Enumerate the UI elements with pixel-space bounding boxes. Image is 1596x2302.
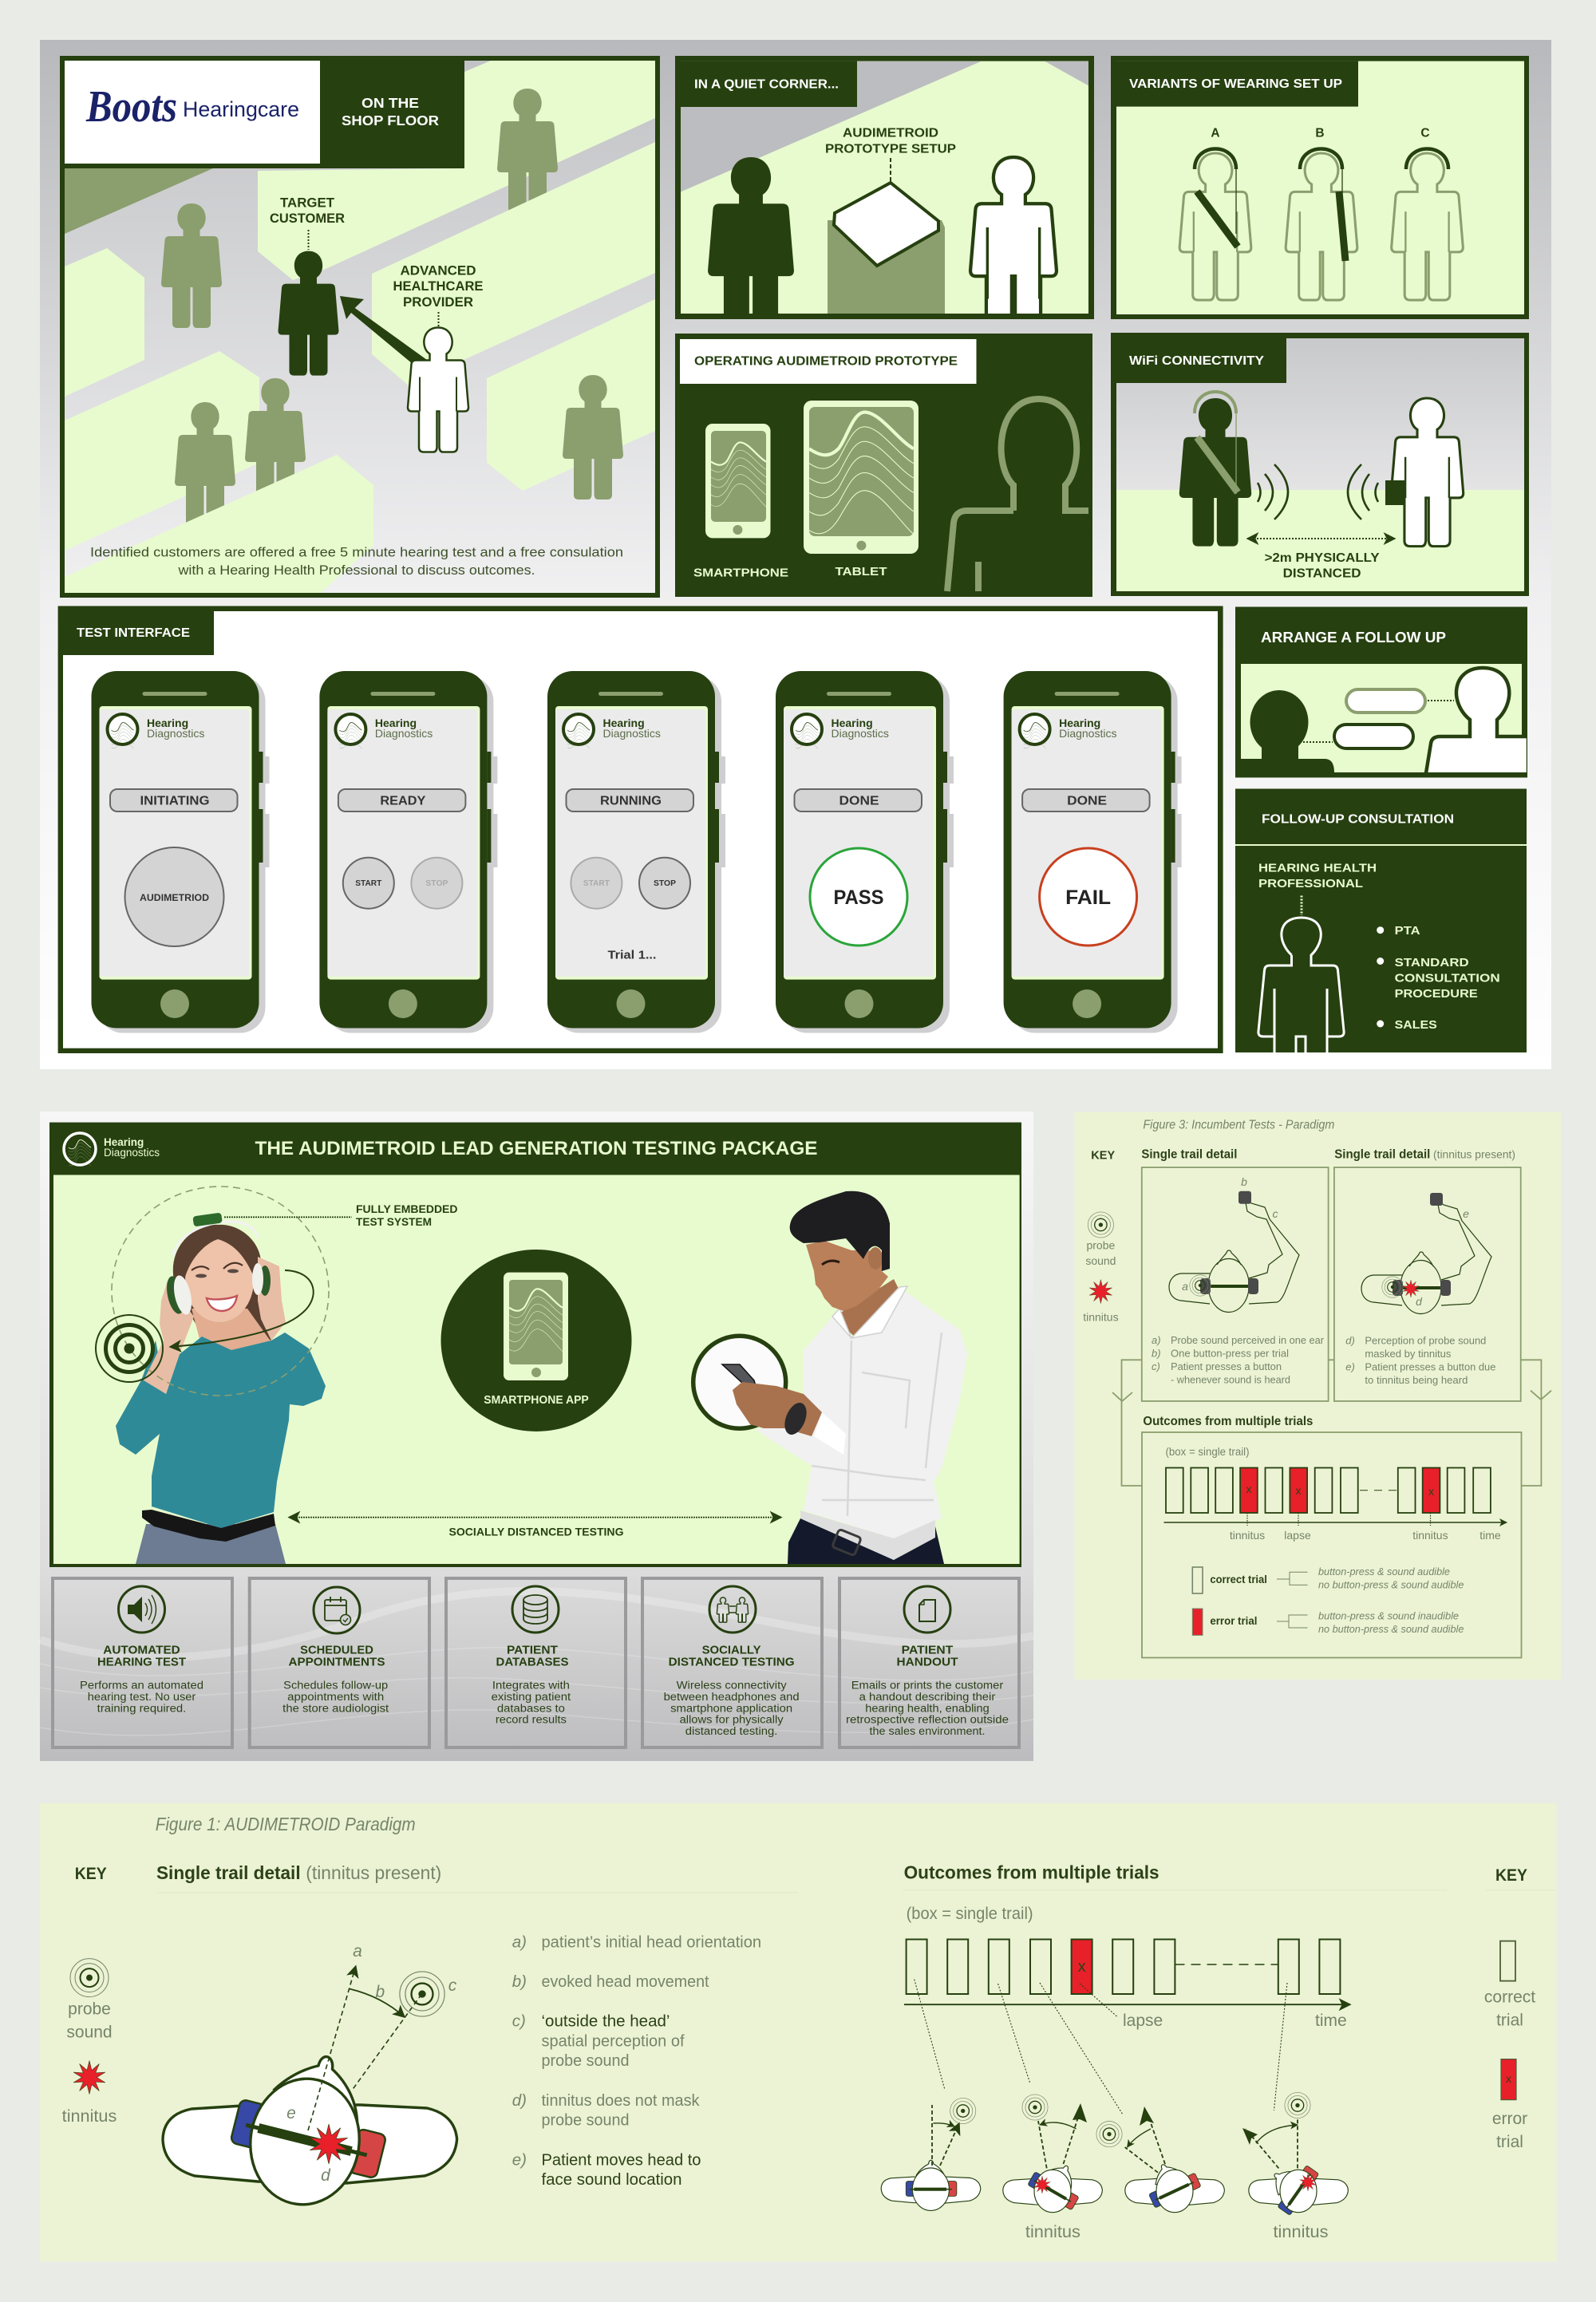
phone: ready: READY <box>380 795 426 808</box>
panel: follow-up consultation <box>1235 788 1527 1057</box>
box: outcomes from multiple trials: (box = single trail) <box>1165 1446 1250 1458</box>
speech bubbles <box>1303 689 1454 748</box>
list: consultation contents: PTA <box>1395 924 1420 938</box>
phone: initiating <box>91 671 270 1033</box>
illustration: woman with headphones <box>116 1213 326 1564</box>
heading: test interface: TEST INTERFACE <box>77 626 190 640</box>
list: paradigm notes: a) <box>512 1933 527 1952</box>
panel: test interface <box>58 606 1223 1053</box>
phone: running: START <box>583 879 610 888</box>
heading: on the shop floor: SHOP FLOOR <box>342 113 439 128</box>
icon: user outline <box>947 399 1088 591</box>
heading: on the shop floor: ON THE <box>361 95 419 111</box>
chart: trial sequence: x <box>1078 1958 1086 1976</box>
list: paradigm notes: face sound location <box>541 2170 681 2189</box>
icon: customer behind shelf <box>497 89 558 213</box>
card: automated hearing test: training required. <box>97 1702 186 1714</box>
panel: operating audimetroid prototype <box>675 334 1092 597</box>
box: outcomes from multiple trials: lapse <box>1284 1529 1311 1542</box>
box: single trial detail with tinnitus: Patient presses a button due <box>1365 1361 1495 1373</box>
card: scheduled appointments: APPOINTMENTS <box>289 1655 385 1668</box>
icon: provider with tablet <box>1348 398 1464 547</box>
panel: in a quiet corner <box>675 56 1094 334</box>
arrow: provider to customer <box>340 296 427 364</box>
phone: initiating: INITIATING <box>140 795 209 808</box>
label: tinnitus trials: tinnitus <box>1025 2223 1080 2241</box>
key: right <box>1484 1866 1535 2151</box>
diagram: head movement: b <box>376 1983 385 2001</box>
box: single trial detail with tinnitus <box>1334 1148 1521 1401</box>
logo: hearing diagnostics: Diagnostics <box>104 1147 160 1159</box>
phone: done pass: Diagnostics <box>832 727 889 740</box>
list: consultation contents: SALES <box>1395 1018 1437 1032</box>
list: consultation contents <box>1377 924 1500 1032</box>
panel: arrange a follow up: ARRANGE A FOLLOW UP <box>1261 630 1446 646</box>
label: tablet: TABLET <box>835 565 887 578</box>
card: patient databases: databases to <box>497 1702 565 1714</box>
icon: target customer <box>278 251 338 376</box>
card: patient databases: existing patient <box>492 1691 571 1703</box>
trial legend: error trial <box>1210 1615 1257 1627</box>
logo: hearing diagnostics <box>64 1133 160 1166</box>
card: scheduled appointments <box>250 1578 429 1747</box>
panel: figure 1 audimetroid paradigm <box>40 1803 1556 2261</box>
list: paradigm notes: probe sound <box>541 2110 629 2129</box>
card: socially distanced testing: between headphones and <box>664 1691 800 1703</box>
key: right: correct <box>1484 1988 1535 2006</box>
key: right: trial <box>1496 2133 1523 2151</box>
variant C: C <box>1420 127 1430 140</box>
phone: running <box>547 671 725 1033</box>
heading: test interface <box>63 611 214 655</box>
key: probe sound and tinnitus: probe <box>1086 1238 1116 1251</box>
box: outcomes from multiple trials: x <box>1296 1484 1301 1497</box>
card: patient handout: the sales environment. <box>870 1725 985 1737</box>
box: single trial detail with tinnitus: d) <box>1345 1335 1355 1347</box>
label: healthcare provider <box>393 263 484 327</box>
label: prototype setup: AUDIMETROID <box>843 127 938 140</box>
label: physically distanced: >2m PHYSICALLY <box>1265 551 1380 565</box>
decorative orbit <box>112 1187 329 1396</box>
diagram: trial 4 head with tinnitus <box>1242 2092 1348 2216</box>
card: patient handout: Emails or prints the customer <box>851 1680 1004 1692</box>
panel: follow-up consultation: FOLLOW-UP CONSULTATION <box>1262 812 1454 826</box>
panel: figure 3 incumbent tests <box>1074 1112 1562 1680</box>
diagram: head movement <box>163 1942 457 2212</box>
logo box <box>65 61 320 164</box>
panel: lead generation testing package <box>49 1123 1021 1567</box>
box: single trial detail with tinnitus: e <box>1463 1207 1469 1220</box>
box: single trial detail <box>1141 1148 1329 1401</box>
label: smartphone: SMARTPHONE <box>693 567 788 580</box>
callout: fully embedded test system <box>224 1203 458 1228</box>
panel: figure 3 incumbent tests: Figure 3: Incumbent Tests - Paradigm <box>1143 1119 1334 1132</box>
trial legend: correct trial <box>1210 1573 1267 1585</box>
diagram: head movement: a <box>353 1942 362 1960</box>
phone: done pass: DONE <box>839 795 879 808</box>
card: scheduled appointments: the store audiologist <box>282 1702 389 1714</box>
arrow: physical distance <box>1247 538 1395 539</box>
label: healthcare provider: ADVANCED <box>401 263 476 278</box>
box: outcomes from multiple trials: tinnitus <box>1230 1529 1265 1542</box>
label: prototype setup <box>825 127 956 156</box>
card: patient databases: DATABASES <box>496 1655 568 1668</box>
icon: tablet <box>804 401 918 554</box>
panel: storyboard backdrop <box>40 40 1551 1069</box>
phone: ready: Hearing <box>375 717 417 729</box>
card: automated hearing test: HEARING TEST <box>97 1655 186 1668</box>
icon: calendar <box>314 1587 360 1633</box>
panel: variants of wearing set up <box>1111 56 1529 319</box>
arrow: curved sound path <box>170 1270 314 1347</box>
heading: operating prototype: OPERATING AUDIMETROID PROTOTYPE <box>694 355 958 369</box>
variant A <box>1179 127 1251 300</box>
diagram: head movement: d <box>321 2166 331 2185</box>
key: probe sound and tinnitus <box>1083 1212 1119 1324</box>
panel: figure 1 audimetroid paradigm: Figure 1: AUDIMETROID Paradigm <box>156 1814 416 1834</box>
heading: variants <box>1116 61 1358 107</box>
heading: wifi: WiFi CONNECTIVITY <box>1129 354 1264 368</box>
caption: shop floor <box>90 544 623 578</box>
card: patient handout: hearing health, enabling <box>865 1702 990 1714</box>
box: single trial detail: b <box>1241 1175 1247 1188</box>
box: single trial detail with tinnitus: (tinnitus present) <box>1433 1149 1515 1161</box>
list: paradigm notes: spatial perception of <box>541 2032 685 2051</box>
icon: customer head <box>1235 690 1334 772</box>
caption: shop floor: Identified customers are offered a free 5 minute hearing test and a free consulation <box>90 544 623 560</box>
key: right: trial <box>1496 2011 1523 2030</box>
arrow: socially distanced <box>289 1517 781 1518</box>
icon: smartphone <box>705 424 771 538</box>
box: single trial detail: Single trail detail <box>1141 1148 1237 1162</box>
key: left: probe <box>68 2000 111 2019</box>
card: automated hearing test <box>53 1578 232 1747</box>
box: outcomes from multiple trials: time <box>1479 1529 1501 1542</box>
card: socially distanced testing: allows for physically <box>680 1714 784 1726</box>
list: paradigm notes: probe sound <box>541 2051 629 2070</box>
phone: done fail: Hearing <box>1059 717 1100 729</box>
label: target customer: CUSTOMER <box>270 211 345 226</box>
key: right: error <box>1492 2110 1527 2128</box>
label: tinnitus trials: tinnitus <box>1274 2223 1328 2241</box>
chart: trial sequence <box>904 1939 1350 2114</box>
panel: arrange a follow up <box>1235 606 1528 778</box>
key: probe sound and tinnitus: sound <box>1085 1254 1116 1267</box>
label: target customer <box>270 196 345 250</box>
card: patient handout <box>839 1578 1019 1747</box>
box: single trial detail: b) <box>1152 1348 1161 1360</box>
icon: two people <box>709 1586 756 1633</box>
phone: ready: Diagnostics <box>375 727 433 740</box>
phone: done pass: PASS <box>833 886 884 909</box>
phone: initiating: Diagnostics <box>147 727 204 740</box>
heading: single trial detail: Single trail detail <box>156 1862 301 1883</box>
card: socially distanced testing <box>642 1578 822 1747</box>
diagram: trial 1 head <box>881 2098 981 2210</box>
phone: running: Trial 1... <box>608 949 656 962</box>
phone: done fail: FAIL <box>1065 886 1111 909</box>
list: paradigm notes: d) <box>512 2091 527 2110</box>
label: physically distanced: DISTANCED <box>1283 567 1361 581</box>
card: patient handout: PATIENT <box>902 1644 953 1657</box>
phone: running: STOP <box>654 879 676 888</box>
box: single trial detail: - whenever sound is heard <box>1171 1373 1290 1385</box>
heading: single trial detail <box>156 1862 441 1883</box>
box: single trial detail: Patient presses a button <box>1171 1360 1282 1372</box>
box: single trial detail with tinnitus: masked by tinnitus <box>1365 1348 1452 1360</box>
phone: initiating: Hearing <box>147 717 188 729</box>
heading: outcomes: Outcomes from multiple trials <box>904 1862 1159 1882</box>
box: single trial detail: c <box>1272 1207 1278 1220</box>
illustration: man with smartphone <box>693 1191 967 1564</box>
label: target customer: TARGET <box>280 196 334 211</box>
icon: professional outline <box>1258 895 1344 1057</box>
card: scheduled appointments: SCHEDULED <box>300 1644 373 1657</box>
card: patient handout: a handout describing their <box>859 1691 996 1703</box>
variant B: B <box>1315 127 1325 140</box>
diagram: head movement: e <box>286 2104 296 2122</box>
card: socially distanced testing: distanced testing. <box>685 1725 777 1737</box>
trial legend: button-press & sound audible <box>1318 1566 1450 1577</box>
card: patient databases <box>446 1578 626 1747</box>
phone: done fail: DONE <box>1067 795 1107 808</box>
key: right: KEY <box>1495 1866 1527 1885</box>
card: socially distanced testing: SOCIALLY <box>702 1644 761 1657</box>
label: physically distanced <box>1265 551 1380 581</box>
trial legend: no button-press & sound audible <box>1318 1623 1464 1635</box>
box: single trial detail with tinnitus: to tinnitus being heard <box>1365 1374 1468 1386</box>
phone: running: Diagnostics <box>603 727 661 740</box>
list: consultation contents: PROCEDURE <box>1395 987 1478 1001</box>
variant A: A <box>1211 127 1220 140</box>
phone: running: Hearing <box>603 717 645 729</box>
card: scheduled appointments: Schedules follow-up <box>283 1680 388 1692</box>
caption: shop floor: with a Hearing Health Professional to discuss outcomes. <box>177 563 535 578</box>
box: single trial detail with tinnitus: Perception of probe sound <box>1365 1335 1486 1347</box>
key: left: tinnitus <box>62 2107 117 2126</box>
label: hearing health professional: PROFESSIONAL <box>1258 877 1363 890</box>
phone: ready: STOP <box>425 879 448 888</box>
key: right: x <box>1506 2072 1511 2085</box>
callout: fully embedded test system: FULLY EMBEDDED <box>356 1203 458 1215</box>
badge: smartphone app: SMARTPHONE APP <box>484 1394 589 1407</box>
label: hearing health professional: HEARING HEALTH <box>1258 862 1377 875</box>
icon: speaker <box>118 1586 164 1633</box>
icon: customer and provider <box>708 157 1057 334</box>
connectors <box>1112 1360 1551 1486</box>
key: probe sound and tinnitus: tinnitus <box>1083 1311 1119 1324</box>
heading: single trial detail: (tinnitus present) <box>306 1862 441 1883</box>
panel: on the shop floor <box>60 56 660 598</box>
list: paradigm notes: tinnitus does not mask <box>541 2091 700 2110</box>
list: paradigm notes: ‘outside the head’ <box>541 2012 670 2030</box>
panel: audimetroid package backdrop <box>40 1112 1033 1761</box>
label: healthcare provider: PROVIDER <box>403 295 473 310</box>
card: scheduled appointments: appointments with <box>287 1691 384 1703</box>
callout: fully embedded test system: TEST SYSTEM <box>356 1216 432 1228</box>
list: consultation contents: CONSULTATION <box>1395 972 1500 985</box>
label: healthcare provider: HEALTHCARE <box>393 279 484 294</box>
icon: document <box>904 1586 950 1633</box>
card: socially distanced testing: Wireless connectivity <box>677 1680 787 1692</box>
card: socially distanced testing: DISTANCED TESTING <box>669 1655 795 1668</box>
list: paradigm notes: c) <box>512 2012 526 2030</box>
card: automated hearing test: AUTOMATED <box>103 1644 180 1657</box>
box: single trial detail with tinnitus: e) <box>1345 1361 1355 1373</box>
card: automated hearing test: hearing test. No user <box>88 1691 196 1703</box>
trial legend <box>1192 1566 1464 1635</box>
heading: in a quiet corner <box>681 61 857 107</box>
variant B <box>1286 127 1357 300</box>
box: outcomes from multiple trials: x <box>1428 1485 1434 1498</box>
heading: in a quiet corner: IN A QUIET CORNER... <box>694 78 839 92</box>
list: paradigm notes: e) <box>512 2150 527 2169</box>
phone: ready: START <box>355 879 382 888</box>
card: patient handout: HANDOUT <box>897 1655 958 1668</box>
logo: hearing diagnostics: Hearing <box>104 1136 144 1148</box>
box: single trial detail: Probe sound perceived in one ear <box>1171 1334 1325 1346</box>
chart: trial sequence: lapse <box>1123 2012 1163 2030</box>
box: single trial detail: a) <box>1152 1334 1161 1346</box>
list: paradigm notes: b) <box>512 1972 527 1991</box>
phone: done fail <box>1004 671 1182 1033</box>
variant C <box>1392 127 1463 300</box>
list: consultation contents: STANDARD <box>1395 956 1469 969</box>
box: outcomes from multiple trials: tinnitus <box>1412 1529 1448 1542</box>
panel: figure 3 incumbent tests: KEY <box>1091 1149 1115 1162</box>
heading: wifi <box>1116 338 1286 383</box>
icon: sound target <box>96 1315 163 1382</box>
label: prototype setup: PROTOTYPE SETUP <box>825 142 956 156</box>
card: patient databases: Integrates with <box>492 1680 570 1692</box>
badge: smartphone app <box>440 1250 632 1431</box>
logo box: Boots <box>85 82 177 132</box>
icon: wearing customer <box>1179 392 1288 547</box>
trial legend: no button-press & sound audible <box>1318 1578 1464 1590</box>
box: outcomes from multiple trials: Outcomes from multiple trials <box>1143 1415 1313 1428</box>
key: left: sound <box>66 2024 113 2041</box>
list: paradigm notes <box>512 1933 761 2189</box>
phone: ready <box>319 671 497 1033</box>
title: THE AUDIMETROID LEAD GENERATION TESTING PACKAGE <box>255 1138 817 1159</box>
label: tinnitus trials <box>1025 2223 1328 2241</box>
card: patient databases: PATIENT <box>507 1644 558 1657</box>
diagram: trial 2 head with tinnitus <box>1003 2095 1102 2213</box>
icon: prototype setup <box>828 158 945 314</box>
box: single trial detail with tinnitus: Single trail detail <box>1334 1148 1430 1162</box>
chart: trial sequence: time <box>1315 2012 1347 2030</box>
panel: wifi connectivity <box>1111 333 1529 596</box>
icon: healthcare provider <box>408 327 468 452</box>
label: hearing health professional <box>1258 862 1377 890</box>
logo box: Hearingcare <box>183 97 299 121</box>
heading: variants: VARIANTS OF WEARING SET UP <box>1129 77 1342 91</box>
diagram: trial 3 head <box>1096 2107 1224 2213</box>
diagram: head movement: c <box>448 1976 457 1995</box>
box: single trial detail: a <box>1182 1280 1188 1293</box>
icon: database <box>512 1586 559 1633</box>
heading: on the shop floor <box>65 61 464 168</box>
phone: done pass: Hearing <box>832 717 873 729</box>
phone: running: RUNNING <box>600 795 662 808</box>
phone: done pass <box>776 671 954 1033</box>
label: socially distanced testing: SOCIALLY DISTANCED TESTING <box>448 1526 624 1538</box>
box: single trial detail: One button-press per trial <box>1171 1348 1289 1360</box>
trial legend: button-press & sound inaudible <box>1318 1610 1459 1622</box>
heading: operating prototype <box>680 339 977 384</box>
list: paradigm notes: evoked head movement <box>541 1972 709 1991</box>
key: left <box>62 1865 117 2126</box>
box: outcomes from multiple trials <box>1142 1415 1521 1658</box>
box: single trial detail with tinnitus: d <box>1416 1295 1423 1308</box>
note: box = single trail: (box = single trail) <box>907 1905 1033 1923</box>
list: paradigm notes: patient’s initial head orientation <box>541 1933 761 1952</box>
icon: background customers <box>161 203 623 527</box>
card: patient databases: record results <box>496 1714 567 1726</box>
card: socially distanced testing: smartphone application <box>670 1702 792 1714</box>
card: patient handout: retrospective reflection outside <box>846 1714 1009 1726</box>
list: paradigm notes: Patient moves head to <box>541 2150 701 2169</box>
card: automated hearing test: Performs an automated <box>80 1680 203 1692</box>
phone: done fail: Diagnostics <box>1059 727 1116 740</box>
phone: initiating: AUDIMETRIOD <box>140 892 209 903</box>
key: left: KEY <box>75 1865 107 1883</box>
box: outcomes from multiple trials: x <box>1246 1483 1251 1495</box>
icon: professional head <box>1425 668 1528 778</box>
trial boxes <box>1166 1468 1491 1513</box>
box: single trial detail: c) <box>1152 1360 1160 1372</box>
